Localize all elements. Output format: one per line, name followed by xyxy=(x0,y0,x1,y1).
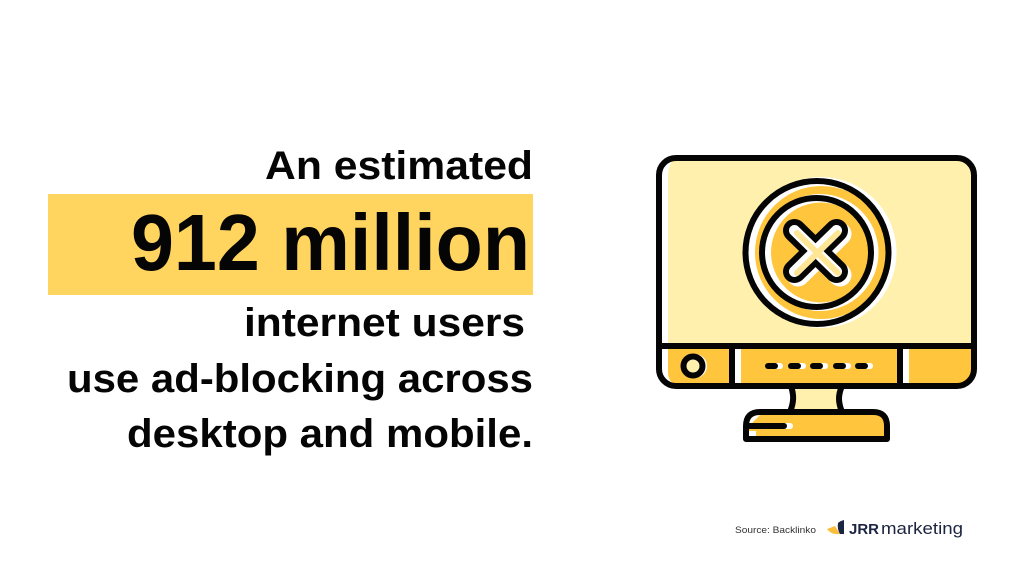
monitor screen xyxy=(659,158,974,346)
text line: desktop and mobile.: desktop and mobile. xyxy=(127,412,533,456)
X mark xyxy=(794,230,840,275)
power button xyxy=(683,354,707,378)
text line: use ad-blocking across: use ad-blocking across xyxy=(67,357,533,401)
heading: An estimated: An estimated xyxy=(265,144,533,188)
icon: monitor with X xyxy=(659,158,974,439)
monitor bottom bar xyxy=(659,346,974,386)
indicator dashes xyxy=(768,363,873,369)
text line: internet users: internet users xyxy=(244,301,525,345)
stand base xyxy=(746,412,887,439)
monitor frame xyxy=(659,158,974,386)
big number: 912 million: 912 million xyxy=(131,198,530,287)
logo mark xyxy=(827,520,844,534)
logo: JRR marketing xyxy=(827,519,963,538)
X badge xyxy=(746,177,896,328)
logo: JRR marketing: marketing xyxy=(881,519,963,538)
monitor stand neck xyxy=(790,386,842,412)
highlight band xyxy=(48,194,533,295)
logo text: JRR xyxy=(849,521,879,538)
source credit: Source: Backlinko xyxy=(735,525,816,536)
